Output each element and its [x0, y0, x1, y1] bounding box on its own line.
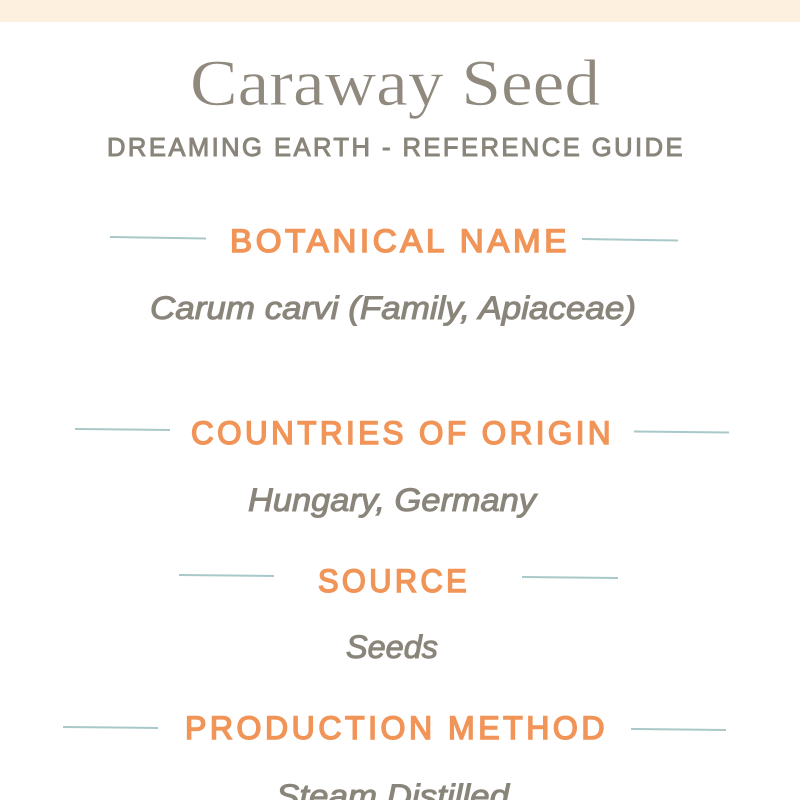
title: Caraway Seed	[190, 47, 600, 120]
text: source value: Seeds	[346, 629, 438, 665]
heading: production method: PRODUCTION METHOD	[185, 710, 608, 746]
text: countries value: Hungary, Germany	[248, 482, 538, 518]
heading: botanical name: BOTANICAL NAME	[230, 223, 570, 259]
subtitle: DREAMING EARTH - REFERENCE GUIDE	[107, 132, 685, 162]
heading: source: SOURCE	[318, 563, 470, 599]
section: countries of origin	[75, 415, 729, 518]
section: source	[179, 563, 618, 665]
section: production method	[63, 710, 726, 800]
heading: countries of origin: COUNTRIES OF ORIGIN	[191, 415, 614, 451]
text: botanical name value: Carum carvi (Family, Apiaceae)	[150, 290, 636, 326]
section: botanical name	[110, 223, 678, 326]
top banner band	[0, 0, 800, 22]
